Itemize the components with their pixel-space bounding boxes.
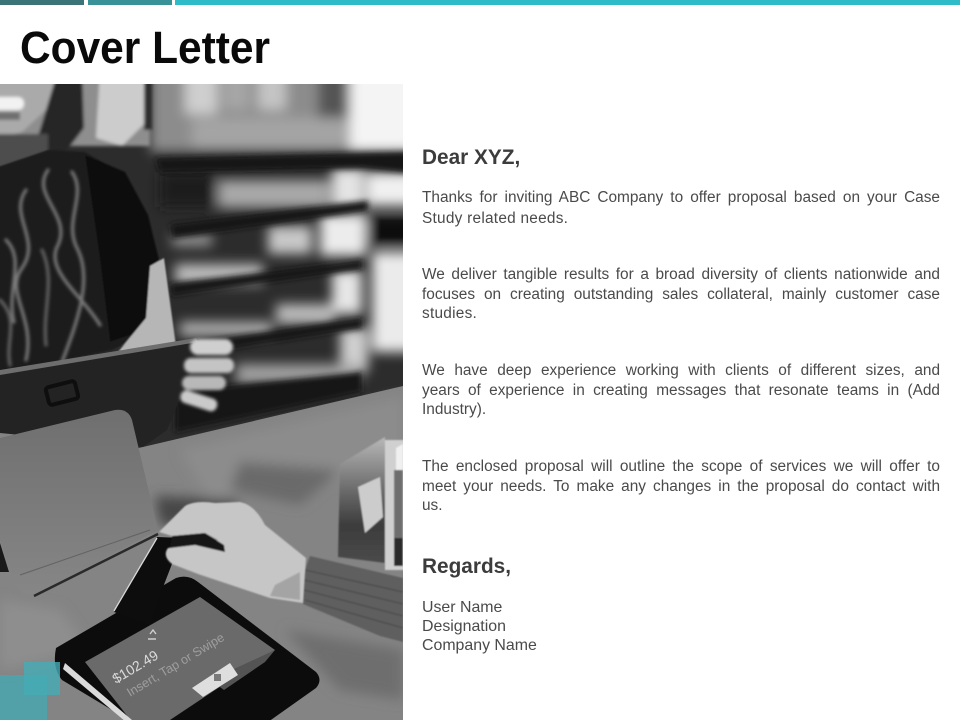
paragraph: proposal scope: us. [422,497,443,514]
counter top [0,386,403,720]
paragraph: results: We deliver tangible results for a broad diversity of clients nationwide and [422,266,940,283]
paragraph: proposal scope: meet your needs. To make any changes in the proposal do contact with [422,478,940,495]
paragraph: experience: We have deep experience working with clients of different sizes, and [422,362,940,379]
grey tablet on stand [0,410,158,596]
paragraph: results [422,266,940,322]
sleeve [303,556,403,642]
paragraph: experience: Industry). [422,401,486,418]
photo: customer paying at a shop counter [0,84,403,720]
shelf boards [155,152,420,432]
closing heading: Regards, [422,555,511,578]
product tube [338,437,405,570]
signature block: User Name [422,599,502,616]
card reader: $102.49 [109,647,161,687]
paragraph: thanks [422,189,940,227]
hand with card [159,502,306,603]
paragraph: experience [422,362,940,418]
top accent bars [0,0,960,5]
blurred shop shelves [143,84,403,386]
paragraph: thanks: Thanks for inviting ABC Company to offer proposal based on your Case [422,189,940,206]
card in hand [114,537,172,613]
woman: dark top and hair [0,150,176,375]
paragraph: proposal scope: The enclosed proposal will outline the scope of services we will offer to [422,458,940,475]
hand holding tablet [179,339,234,413]
paragraph: results: focuses on creating outstanding sales collateral, mainly customer case [422,286,940,303]
woman: face and hair [0,84,154,166]
signature block [422,599,537,654]
signature block: Company Name [422,637,537,654]
paragraph: results: studies. [422,305,477,322]
dark tablet back [0,338,202,447]
curly hair [0,170,100,365]
card reader [55,577,319,720]
card reader: Insert, Tap or Swipe [124,630,227,700]
paragraph: proposal scope [422,458,940,514]
paragraph: experience: years of experience in creating messages that resonate teams in (Add [422,382,940,399]
teal decorative squares [0,662,60,720]
signature block: Designation [422,618,506,635]
greeting heading: Dear XYZ, [422,146,520,169]
title: Cover Letter [20,22,270,73]
paragraph: thanks: Study related needs. [422,210,568,227]
